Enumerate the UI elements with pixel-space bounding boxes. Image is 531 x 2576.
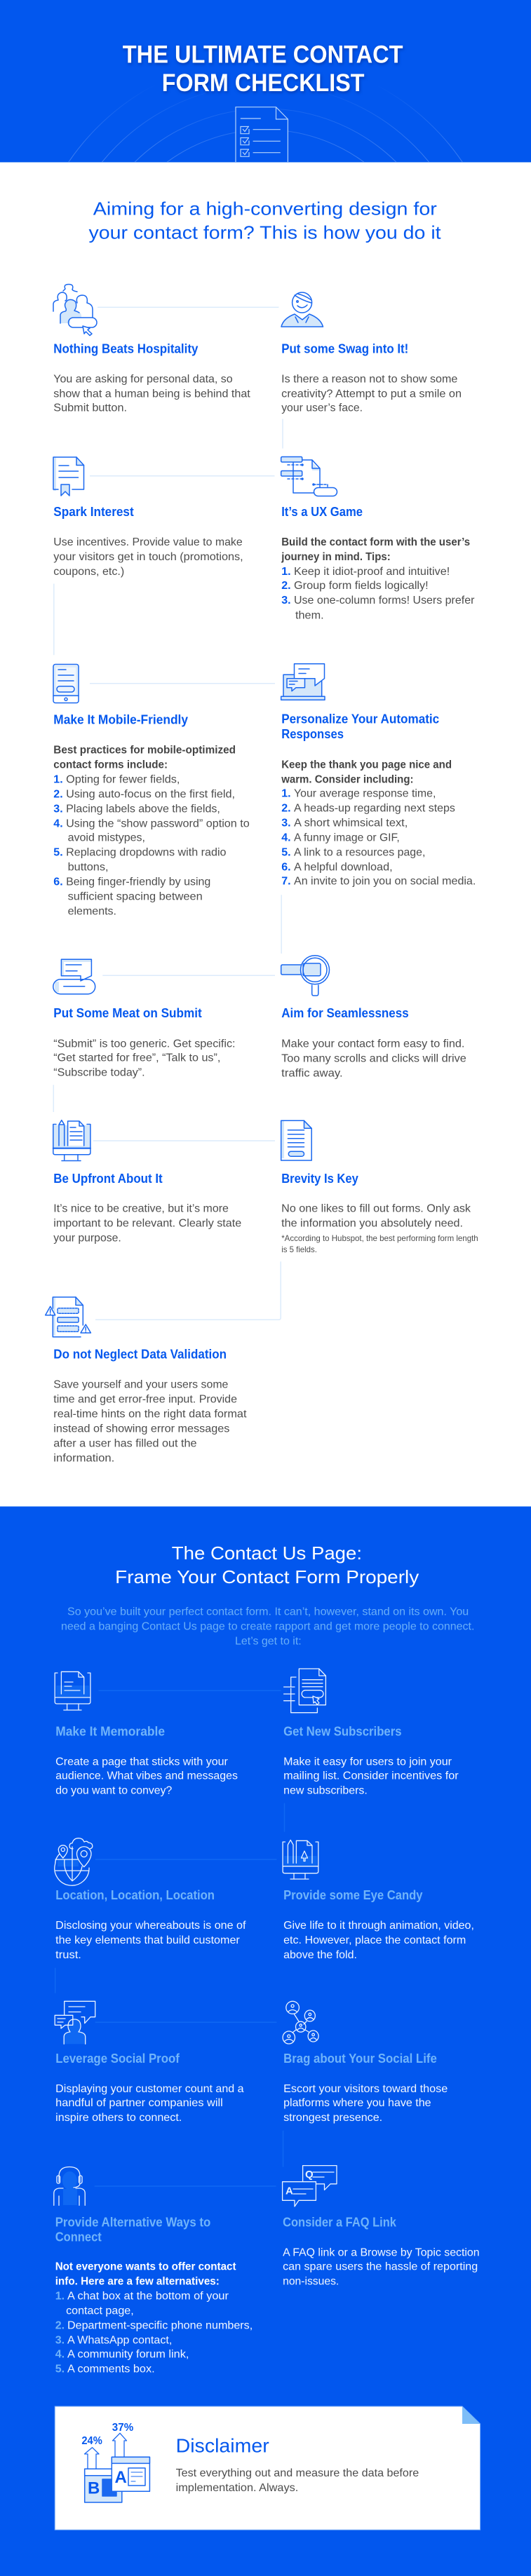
text block: important to be relevant. Clearly state [53,1217,241,1229]
text block [283,2083,448,2124]
panel: ux game [281,457,475,621]
text block: A heads-up regarding next steps [294,802,455,814]
text block [55,2083,244,2124]
text block [283,1756,459,1797]
panel: spark interest [53,457,243,578]
text block: *According to Hubspot, the best performing form length [281,1233,478,1243]
text block: Being finger-friendly by using [66,876,210,888]
heading: Personalize Your Automatic [281,712,439,726]
text block: Use one-column forms! Users prefer [294,595,475,606]
text block: “Subscribe today”. [53,1066,145,1078]
subtitle [88,198,441,243]
text block: avoid mistypes, [68,832,145,843]
text block: Opting for fewer fields, [66,773,180,785]
text block: warm. Consider including: [281,773,414,785]
text block: “Submit” is too generic. Get specific: [53,1038,236,1050]
heading: Make It Mobile-Friendly [53,713,188,727]
panel: alternative ways [54,2167,253,2375]
text block: Keep it idiot-proof and intuitive! [294,566,450,578]
text block: coupons, etc.) [53,566,124,578]
text block: Too many scrolls and clicks will drive [281,1052,466,1064]
text block [53,374,250,414]
heading: Provide Alternative Ways to [55,2216,210,2230]
text block: Group form fields logically! [294,580,429,592]
text block: Save yourself and your users some [53,1378,228,1390]
text block: Displaying your customer count and a [55,2083,244,2095]
text block: 1. [281,566,291,578]
icon: checklist document [236,107,288,162]
icon: people network [283,2001,318,2044]
text block: 2. [53,788,63,800]
heading: Provide some Eye Candy [283,1888,422,1902]
text block: Test everything out and measure the data before [176,2467,419,2479]
heading: Get New Subscribers [283,1725,402,1739]
icon: a/b test chart: 24% [81,2435,102,2447]
icon: smartphone form [53,665,79,703]
icon: a/b test chart: A [115,2468,127,2487]
heading: Aim for Seamlessness [281,1006,409,1020]
icon: laptop with speech bubbles [281,664,325,700]
text block: A short whimsical text, [294,817,408,829]
text block: Build the contact form with the user’s [281,536,470,548]
text block: Make your contact form easy to find. [281,1038,464,1050]
icon: short form document [281,1120,311,1160]
text block: above the fold. [283,1949,357,1961]
section intro: So you’ve built your perfect contact form. It can’t, however, stand on its own. You [67,1606,469,1618]
text block: trust. [55,1949,81,1961]
heading: Consider a FAQ Link [283,2216,397,2230]
text block [55,2260,253,2375]
text block: An invite to join you on social media. [294,875,476,887]
heading: Put Some Meat on Submit [53,1006,202,1020]
fold corner [462,2406,480,2424]
heading: Responses [281,727,344,741]
text block [53,1202,241,1244]
text block: 1. [53,773,63,785]
heading: Be Upfront About It [53,1172,163,1186]
text block: journey in mind. Tips: [281,551,391,563]
panel: faq link [283,2166,480,2287]
text block [281,374,462,414]
icon: a/b test chart: 37% [112,2422,133,2434]
text block: implementation. Always. [176,2482,298,2494]
text block [55,1920,246,1961]
text block: traffic away. [281,1067,343,1079]
panel: meat on submit [53,959,236,1078]
text block: time and get error-free input. Provide [53,1393,237,1405]
heading: Leverage Social Proof [55,2052,180,2066]
text block [283,2246,480,2287]
text block [281,759,476,887]
text block [55,1756,238,1797]
icon: monitor with artwork [283,1840,318,1879]
text block: sufficient spacing between [68,890,203,902]
panel: personalize responses [281,664,476,887]
text block [53,1038,236,1078]
text block [53,1378,247,1464]
title: THE ULTIMATE CONTACT [123,41,403,68]
text block: audience. What vibes and messages [55,1770,238,1782]
section intro [61,1606,474,1647]
heading: Put some Swag into It! [281,342,408,356]
panel: eye candy [283,1840,474,1961]
text block: A link to a resources page, [294,846,425,858]
icon: question and answer bubbles: A [285,2185,293,2197]
text block: 1. [55,2290,65,2302]
heading [281,712,439,741]
text block: No one likes to fill out forms. Only ask [281,1202,471,1214]
text block: can spare users the hassle of reporting [283,2260,478,2272]
text block: 4. [55,2349,65,2361]
icon: person with speech bubbles [55,2001,95,2044]
connector lines: blue section [55,1690,284,2186]
text block: A comments box. [67,2363,155,2375]
text block [53,744,250,917]
icon: flow document [281,457,337,496]
section intro: Let’s get to it: [235,1635,302,1647]
text block: 2. [55,2319,65,2332]
text block: A chat box at the bottom of your [67,2290,229,2302]
text block: Using auto-focus on the first field, [66,788,235,800]
text block: 3. [281,595,291,606]
text block: Escort your visitors toward those [283,2083,448,2095]
section intro: need a banging Contact Us page to create rapport and get more people to connect. [61,1620,474,1632]
text block: mailing list. Consider incentives for [283,1770,459,1782]
text block: after a user has filled out the [53,1437,197,1449]
text block: Create a page that sticks with your [55,1756,229,1768]
text block: 4. [281,832,291,843]
icon: bubble over button [53,959,95,994]
title [123,41,403,97]
text block: 6. [281,861,291,873]
panel: data validation [46,1297,247,1464]
text block: handful of partner companies will [55,2097,223,2109]
text block: Using the “show password” option to [66,818,250,829]
text block: 5. [53,846,63,858]
text block: Not everyone wants to offer contact [55,2260,236,2272]
heading: Disclaimer [176,2434,269,2456]
heading: Brevity Is Key [281,1172,358,1186]
section heading [115,1543,419,1587]
text block: inspire others to connect. [55,2112,182,2124]
icon: monitor with document [55,1672,90,1710]
title: FORM CHECKLIST [162,69,365,97]
text block: 3. [281,817,291,829]
text block: them. [295,609,324,621]
icon: subscribe form [284,1669,325,1713]
text block: do you want to convey? [55,1785,172,1797]
icon: globe with pins and cloud [55,1838,93,1885]
text block: Best practices for mobile-optimized [53,744,236,756]
text block: 7. [281,875,291,887]
heading: Connect [55,2230,102,2244]
panel: new subscribers [283,1669,459,1797]
text block: 4. [53,818,63,829]
icon: question and answer bubbles [283,2166,337,2206]
text block: creativity? Attempt to put a smile on [281,388,462,400]
text block: 2. [281,580,291,592]
connector lines: white section [53,307,283,1320]
text block: contact page, [66,2305,134,2317]
icon: smiling person [281,292,323,327]
text block: non-issues. [283,2276,339,2287]
text block: 1. [281,787,291,799]
text block: your visitors get in touch (promotions, [53,551,243,563]
heading: Spark Interest [53,505,134,519]
text block: Give life to it through animation, video, [283,1920,474,1932]
text block: A FAQ link or a Browse by Topic section [283,2246,480,2258]
text block: A funny image or GIF, [294,832,400,843]
text block: real-time hints on the right data format [53,1408,247,1420]
text block: Keep the thank you page nice and [281,759,452,771]
heading: It’s a UX Game [281,505,363,519]
text block [281,1202,478,1254]
text block: info. Here are a few alternatives: [55,2276,220,2287]
text block: 5. [281,846,291,858]
text block: It’s nice to be creative, but it’s more [53,1202,229,1214]
text block: You are asking for personal data, so [53,374,233,386]
panel: social proof [55,2001,244,2124]
panel: brevity [281,1120,478,1254]
text block: Use incentives. Provide value to make [53,536,243,548]
text block: Is there a reason not to show some [281,374,457,386]
heading: Brag about Your Social Life [283,2052,437,2066]
text block: contact forms include: [53,759,168,771]
text block: “Get started for free”, “Talk to us”, [53,1052,220,1064]
header panel [0,0,531,163]
icon: document with ribbon [53,457,84,496]
text block: the key elements that build customer [55,1934,240,1946]
icon: question and answer bubbles: Q [305,2169,314,2181]
text block: information. [53,1452,114,1464]
text block: etc. However, place the contact form [283,1934,466,1946]
text block [283,1920,474,1961]
text block: platforms where you have the [283,2097,431,2109]
section heading: The Contact Us Page: [172,1543,362,1564]
panel: contact us section background [0,1506,531,2576]
heading [55,2216,210,2244]
text block: your user’s face. [281,402,363,414]
text block: 3. [55,2335,65,2347]
text block [281,536,475,621]
text block: A WhatsApp contact, [67,2335,172,2347]
panel: mobile friendly [53,665,250,917]
text block: A community forum link, [67,2349,189,2361]
icon: people with button [53,285,97,335]
text block: show that a human being is behind that [53,388,250,400]
icon: form with warnings [46,1297,90,1337]
panel: make it memorable [55,1672,238,1797]
text block: is 5 fields. [281,1245,317,1254]
heading: Make It Memorable [55,1725,165,1739]
panel: seamlessness [281,956,466,1079]
subtitle: Aiming for a high-converting design for [93,198,437,219]
text block [281,1038,466,1079]
panel: social life [283,2001,448,2124]
icon: magnifier over form [281,956,330,996]
text block: new subscribers. [283,1785,368,1797]
heading: Do not Neglect Data Validation [53,1348,227,1362]
text block: Replacing dropdowns with radio [66,846,227,858]
icon: a/b test chart [81,2422,149,2502]
text block: Placing labels above the fields, [66,803,220,815]
text block: 3. [53,803,63,815]
panel: nothing beats hospitality [53,285,250,414]
text block: 6. [53,876,63,888]
text block: Department-specific phone numbers, [67,2319,253,2332]
panel: location [55,1838,246,1961]
text block: elements. [68,905,116,917]
icon: monitor with pencil and document [53,1120,90,1161]
panel: put some swag [281,292,462,414]
text block: A helpful download, [294,861,393,873]
text block: instead of showing error messages [53,1423,229,1435]
text block: strongest presence. [283,2112,382,2124]
text block: Your average response time, [294,787,436,799]
subtitle: your contact form? This is how you do it [88,222,441,243]
heading: Location, Location, Location [55,1888,215,1902]
text block: buttons, [68,861,108,873]
text block: Submit button. [53,402,127,414]
text block: Disclosing your whereabouts is one of [55,1920,246,1932]
text block: your purpose. [53,1232,121,1244]
text block: 2. [281,802,291,814]
icon: headset agent [54,2167,85,2205]
text block [53,536,243,578]
section heading: Frame Your Contact Form Properly [115,1566,419,1587]
panel: disclaimer card [55,2406,480,2530]
text block [176,2467,419,2494]
text block: 5. [55,2363,65,2375]
panel: upfront [53,1120,241,1244]
heading: Nothing Beats Hospitality [53,342,198,356]
icon: a/b test chart: B [88,2479,100,2497]
text block: the information you absolutely need. [281,1217,463,1229]
text block: Make it easy for users to join your [283,1756,452,1768]
